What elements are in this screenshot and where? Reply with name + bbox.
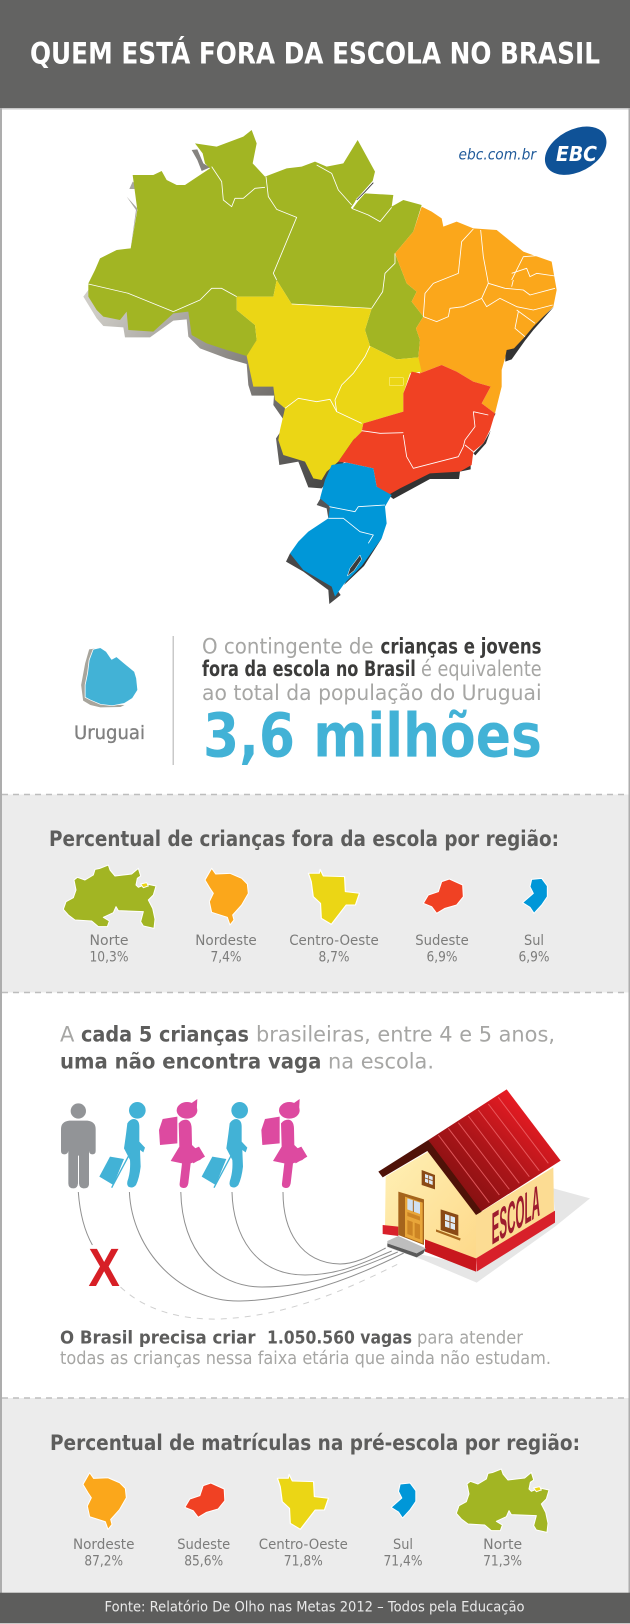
logo: EBC: EBC — [556, 142, 597, 166]
text block: vagas: para atender — [417, 1328, 524, 1348]
logo: EBC — [458, 117, 615, 185]
item: Sul: 6,9% — [518, 950, 550, 966]
region: Nordeste — [395, 207, 557, 413]
item: Centro-Oeste — [289, 869, 379, 966]
text block: contingente — [202, 634, 542, 705]
icon: Uruguay map — [81, 648, 138, 707]
icon: boy with suitcase 2 — [202, 1102, 248, 1188]
item: Nordeste: 87,2% — [84, 1554, 123, 1570]
text block: vagas: O Brasil precisa criar — [60, 1328, 256, 1348]
heading text: uma não encontra vaga — [60, 1049, 321, 1073]
item: Sul — [384, 1483, 422, 1570]
region: Sul — [290, 463, 392, 597]
item: Sudeste: 85,6% — [184, 1554, 223, 1570]
icon: girl with backpack 2 — [261, 1099, 307, 1188]
item: Nordeste — [195, 868, 257, 966]
item: Norte: Norte — [483, 1537, 522, 1553]
text block: vagas: 1.050.560 vagas — [267, 1328, 412, 1348]
heading text: na escola. — [328, 1049, 434, 1073]
item: Sul: Sul — [393, 1537, 413, 1553]
item: Centro-Oeste — [259, 1474, 348, 1570]
text block: contingente: O contingente de — [202, 634, 374, 658]
item: Sudeste — [415, 879, 469, 966]
header band — [0, 0, 630, 110]
section: 1 in 5 children — [60, 1023, 590, 1369]
item: Norte: 10,3% — [90, 950, 128, 966]
item: Nordeste: Nordeste — [195, 933, 257, 949]
item: Centro-Oeste: 71,8% — [284, 1554, 323, 1570]
item: Norte — [456, 1469, 549, 1570]
source text: Fonte: Relatório De Olho nas Metas 2012 – Todos pela Educação — [104, 1600, 525, 1616]
item: Nordeste: Nordeste — [73, 1537, 135, 1553]
school house illustration — [378, 1089, 590, 1283]
item: Sudeste: 6,9% — [426, 950, 458, 966]
heading: Percentual de crianças fora da escola por região: — [49, 827, 559, 851]
item: Sul — [518, 878, 550, 966]
text block: vagas — [60, 1328, 551, 1369]
path lines to school — [78, 1192, 404, 1319]
icon: girl with backpack 1 — [159, 1099, 205, 1188]
item: Sudeste: Sudeste — [177, 1537, 230, 1553]
label: Uruguai: Uruguai — [74, 722, 145, 744]
house windows — [422, 1170, 461, 1241]
map of Brazil by region — [83, 130, 557, 604]
icon: gray child — [61, 1103, 96, 1188]
heading text: cada 5 crianças — [81, 1023, 249, 1047]
item: Centro-Oeste: Centro-Oeste — [289, 933, 379, 949]
house door — [398, 1192, 424, 1245]
text block: contingente: é equivalente — [421, 657, 542, 681]
item: Nordeste: 7,4% — [210, 950, 242, 966]
region: Sudeste — [338, 365, 495, 495]
heading text — [60, 1023, 555, 1073]
item: Nordeste — [73, 1473, 135, 1570]
house step — [387, 1236, 426, 1257]
heading text: A — [60, 1023, 75, 1047]
region: Norte — [88, 130, 423, 359]
panel: pre-school enrollment by region — [0, 1398, 630, 1593]
item: Sudeste: Sudeste — [415, 933, 469, 949]
text block: contingente: crianças e jovens — [380, 634, 542, 658]
map shadow — [83, 149, 554, 604]
panel: percent out of school by region — [0, 794, 630, 992]
item: Sudeste — [177, 1483, 230, 1570]
item: Centro-Oeste: Centro-Oeste — [259, 1537, 348, 1553]
big number: 3,6 milhões — [203, 701, 542, 772]
text block: contingente: fora da escola no Brasil — [202, 657, 416, 681]
item: Norte: 71,3% — [483, 1554, 522, 1570]
icon: boy with suitcase 1 — [99, 1102, 146, 1188]
text block: contingente: ao total da população do Uruguai — [202, 681, 542, 705]
item: Centro-Oeste: 8,7% — [318, 950, 350, 966]
children icons — [61, 1099, 307, 1188]
item: Norte — [63, 865, 156, 966]
region: Centro-Oeste — [237, 280, 422, 480]
heading text: brasileiras, entre 4 e 5 anos, — [256, 1023, 555, 1047]
logo: EBC: ebc.com.br — [458, 145, 537, 163]
text block: vagas: todas as crianças nessa faixa etária que ainda não estudam. — [60, 1349, 551, 1369]
item: Norte: Norte — [90, 933, 129, 949]
footer band — [0, 1593, 630, 1624]
red X mark: X — [88, 1238, 120, 1298]
state borders — [88, 165, 555, 543]
Uruguay comparison section — [74, 634, 542, 772]
item: Sul: 71,4% — [384, 1554, 422, 1570]
item: Sul: Sul — [524, 933, 544, 949]
